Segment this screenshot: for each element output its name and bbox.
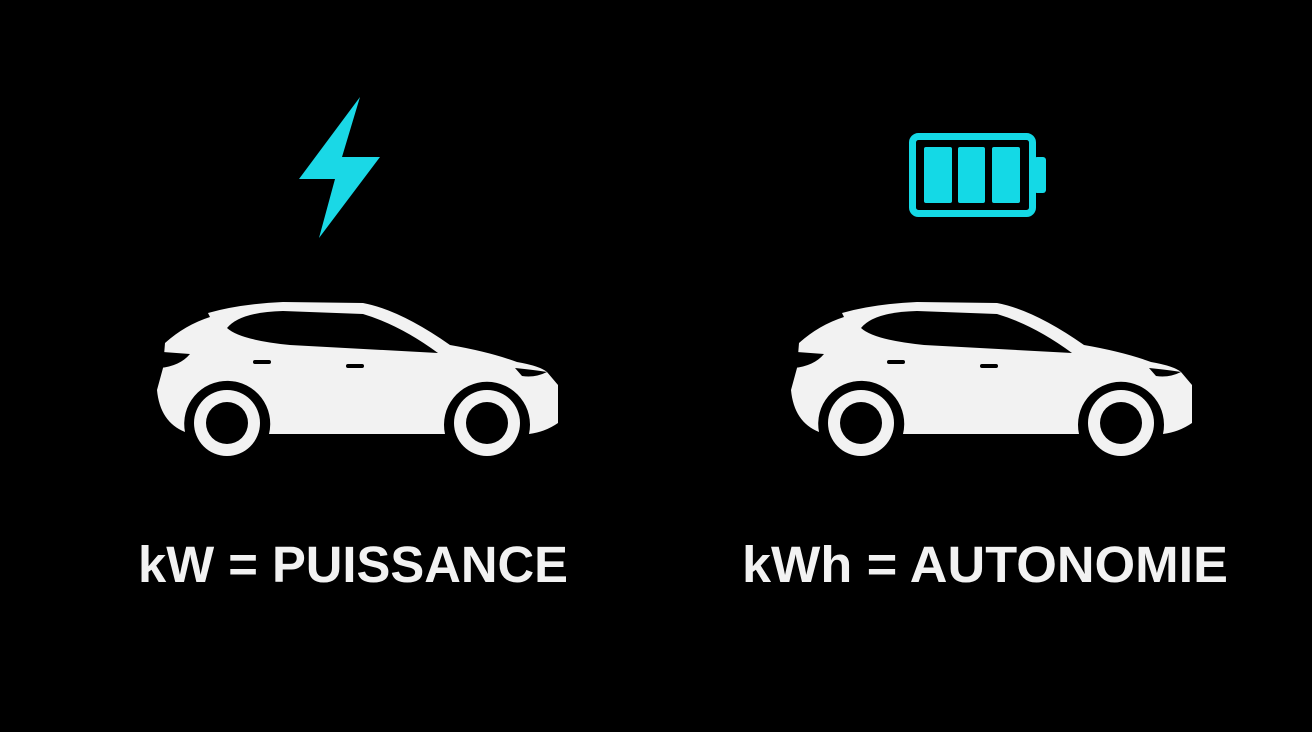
label: kW = PUISSANCE: kW = PUISSANCE: [138, 536, 568, 593]
icon: battery: [912, 136, 1046, 214]
car: left: [157, 302, 558, 456]
car: right: [791, 302, 1192, 456]
icon: lightning bolt: [299, 97, 380, 238]
label: kWh = AUTONOMIE: kWh = AUTONOMIE: [742, 536, 1228, 593]
